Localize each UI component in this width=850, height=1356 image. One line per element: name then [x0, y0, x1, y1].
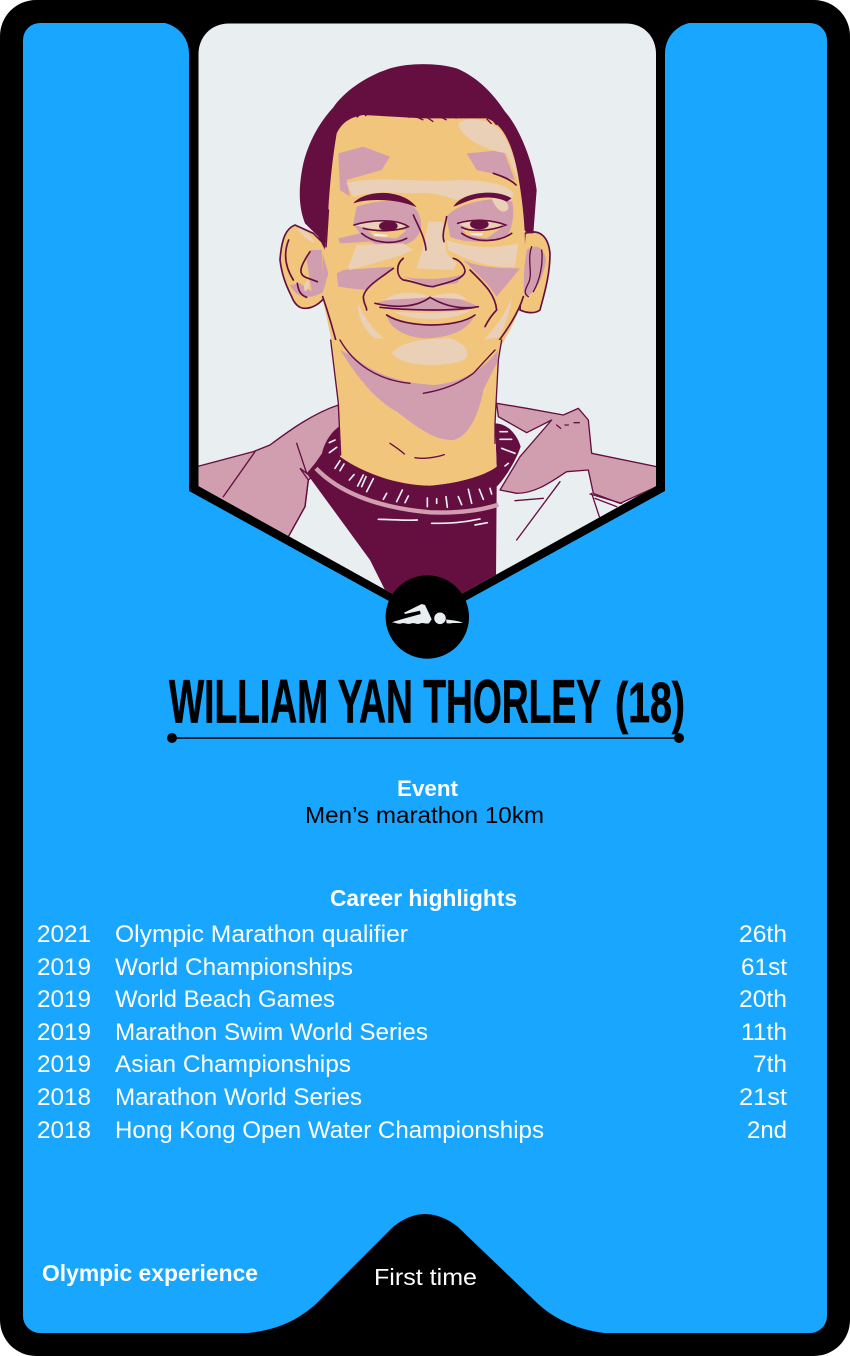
- chin highlight: [392, 338, 467, 365]
- career highlights table: Marathon Swim World Series: [115, 1019, 428, 1046]
- neck lines: [331, 340, 502, 458]
- title: (18): [615, 671, 685, 735]
- olympic experience value: First time: [374, 1264, 477, 1290]
- career highlights table: 2018: [37, 1084, 91, 1111]
- career highlights table: Asian Championships: [115, 1051, 351, 1078]
- career highlights table: Marathon World Series: [115, 1084, 362, 1111]
- face: [323, 115, 525, 350]
- sport badge: [386, 575, 469, 659]
- career highlights table: 61st: [741, 954, 787, 981]
- illustration: clothing: [197, 403, 657, 603]
- career highlights table: 2019: [37, 986, 91, 1013]
- career highlights table: World Beach Games: [115, 986, 335, 1013]
- face shading: [323, 147, 520, 338]
- right ear lines: [525, 247, 542, 297]
- event: Event: [397, 776, 458, 801]
- career highlights table: 2nd: [747, 1117, 787, 1144]
- career highlights table: 11th: [741, 1019, 787, 1046]
- illustration: head: [280, 64, 550, 350]
- collar ticks: [329, 432, 515, 525]
- portrait: [190, 20, 670, 620]
- career highlights table: Olympic Marathon qualifier: [115, 921, 408, 948]
- neck skin: [331, 340, 502, 486]
- left ear lines: [286, 240, 317, 297]
- career highlights table: 2019: [37, 954, 91, 981]
- career highlights table: World Championships: [115, 954, 353, 981]
- hairline strands: [357, 113, 497, 125]
- olympic experience label: Olympic experience: [42, 1260, 258, 1286]
- illustration: neck: [331, 338, 502, 486]
- neck shadow: [340, 350, 498, 440]
- face highlights: [347, 119, 518, 340]
- event: [305, 776, 544, 828]
- right jacket: [497, 403, 657, 503]
- sweater: [307, 423, 521, 603]
- hair: [300, 64, 537, 250]
- sweater collar band: [316, 468, 498, 513]
- career highlights table: 20th: [739, 986, 787, 1013]
- icon: swimmer: [392, 604, 463, 624]
- left ear: [280, 225, 327, 308]
- left jacket: [197, 405, 342, 537]
- career highlights table: Hong Kong Open Water Championships: [115, 1117, 544, 1144]
- right ear shading: [524, 247, 546, 297]
- career highlights table: 26th: [739, 921, 787, 948]
- career highlights table: 2019: [37, 1019, 91, 1046]
- heading: career highlights: Career highlights: [330, 885, 517, 911]
- title underline: [167, 733, 684, 743]
- left ear highlight: [297, 228, 314, 292]
- career highlights table: 21st: [739, 1084, 787, 1111]
- portrait frame: [158, 22, 696, 622]
- career highlights table: 2021: [37, 921, 91, 948]
- career highlights table: 2018: [37, 1117, 91, 1144]
- face lines: [323, 173, 523, 350]
- eyebrows: [353, 193, 512, 207]
- left ear shading: [290, 250, 324, 297]
- career highlights table: [37, 921, 787, 1144]
- right ear: [520, 232, 550, 313]
- career highlights table: 7th: [753, 1051, 787, 1078]
- clothing lines: [223, 423, 622, 540]
- eyes: [355, 219, 505, 238]
- event: Men’s marathon 10km: [305, 802, 544, 828]
- bottom tab: [233, 1214, 618, 1334]
- career highlights table: 2019: [37, 1051, 91, 1078]
